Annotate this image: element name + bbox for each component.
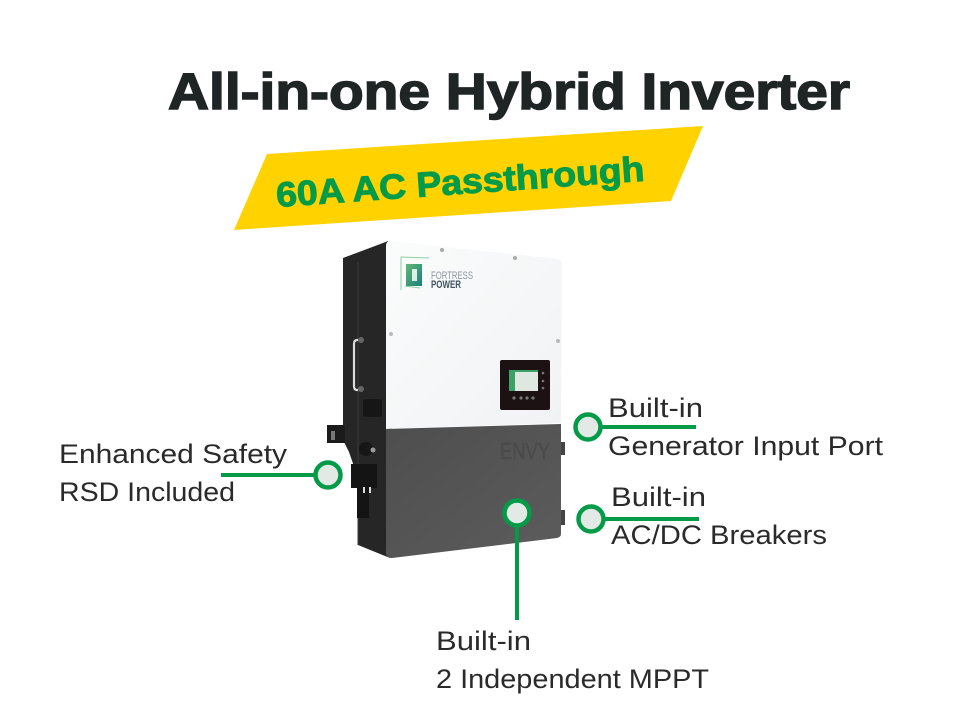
side latches <box>561 442 565 455</box>
rapid shutdown switch <box>351 464 377 518</box>
callout: Built-in AC/DC Breakers: AC/DC Breakers <box>611 520 827 550</box>
Fortress Power logo: POWER <box>431 279 461 291</box>
Fortress Power logo: FORTRESS <box>431 270 473 282</box>
display screen <box>500 360 550 410</box>
callout: Enhanced Safety RSD Included: RSD Included <box>59 477 235 507</box>
callout: Built-in Generator Input Port: Built-in <box>608 393 703 423</box>
title: All-in-one Hybrid Inverter <box>168 63 850 120</box>
mounting bracket <box>327 425 345 443</box>
callout: Built-in 2 Independent MPPT: 2 Independent MPPT <box>436 664 709 694</box>
callout: Enhanced Safety RSD Included: Enhanced Safety <box>59 439 288 469</box>
inverter product image <box>327 241 565 558</box>
banner: 60A AC Passthrough <box>234 126 703 230</box>
banner: 60A AC Passthrough: 60A AC Passthrough <box>275 150 646 215</box>
callout: Enhanced Safety RSD Included <box>59 439 340 507</box>
ENVY mark: ENVY <box>500 438 550 464</box>
side handle <box>354 340 358 390</box>
callout: Built-in Generator Input Port <box>576 393 884 461</box>
inverter side panel <box>343 241 392 558</box>
callout: Built-in AC/DC Breakers: Built-in <box>611 482 706 512</box>
white upper front panel <box>386 241 562 429</box>
callout: Built-in 2 Independent MPPT: Built-in <box>436 626 531 656</box>
callout: Built-in Generator Input Port: Generator Input Port <box>608 431 884 461</box>
grey lower cover <box>386 424 561 558</box>
callout: Built-in 2 Independent MPPT <box>436 500 709 694</box>
side connector <box>363 399 382 417</box>
callout: Built-in AC/DC Breakers <box>578 482 827 550</box>
Fortress Power logo <box>401 257 473 291</box>
